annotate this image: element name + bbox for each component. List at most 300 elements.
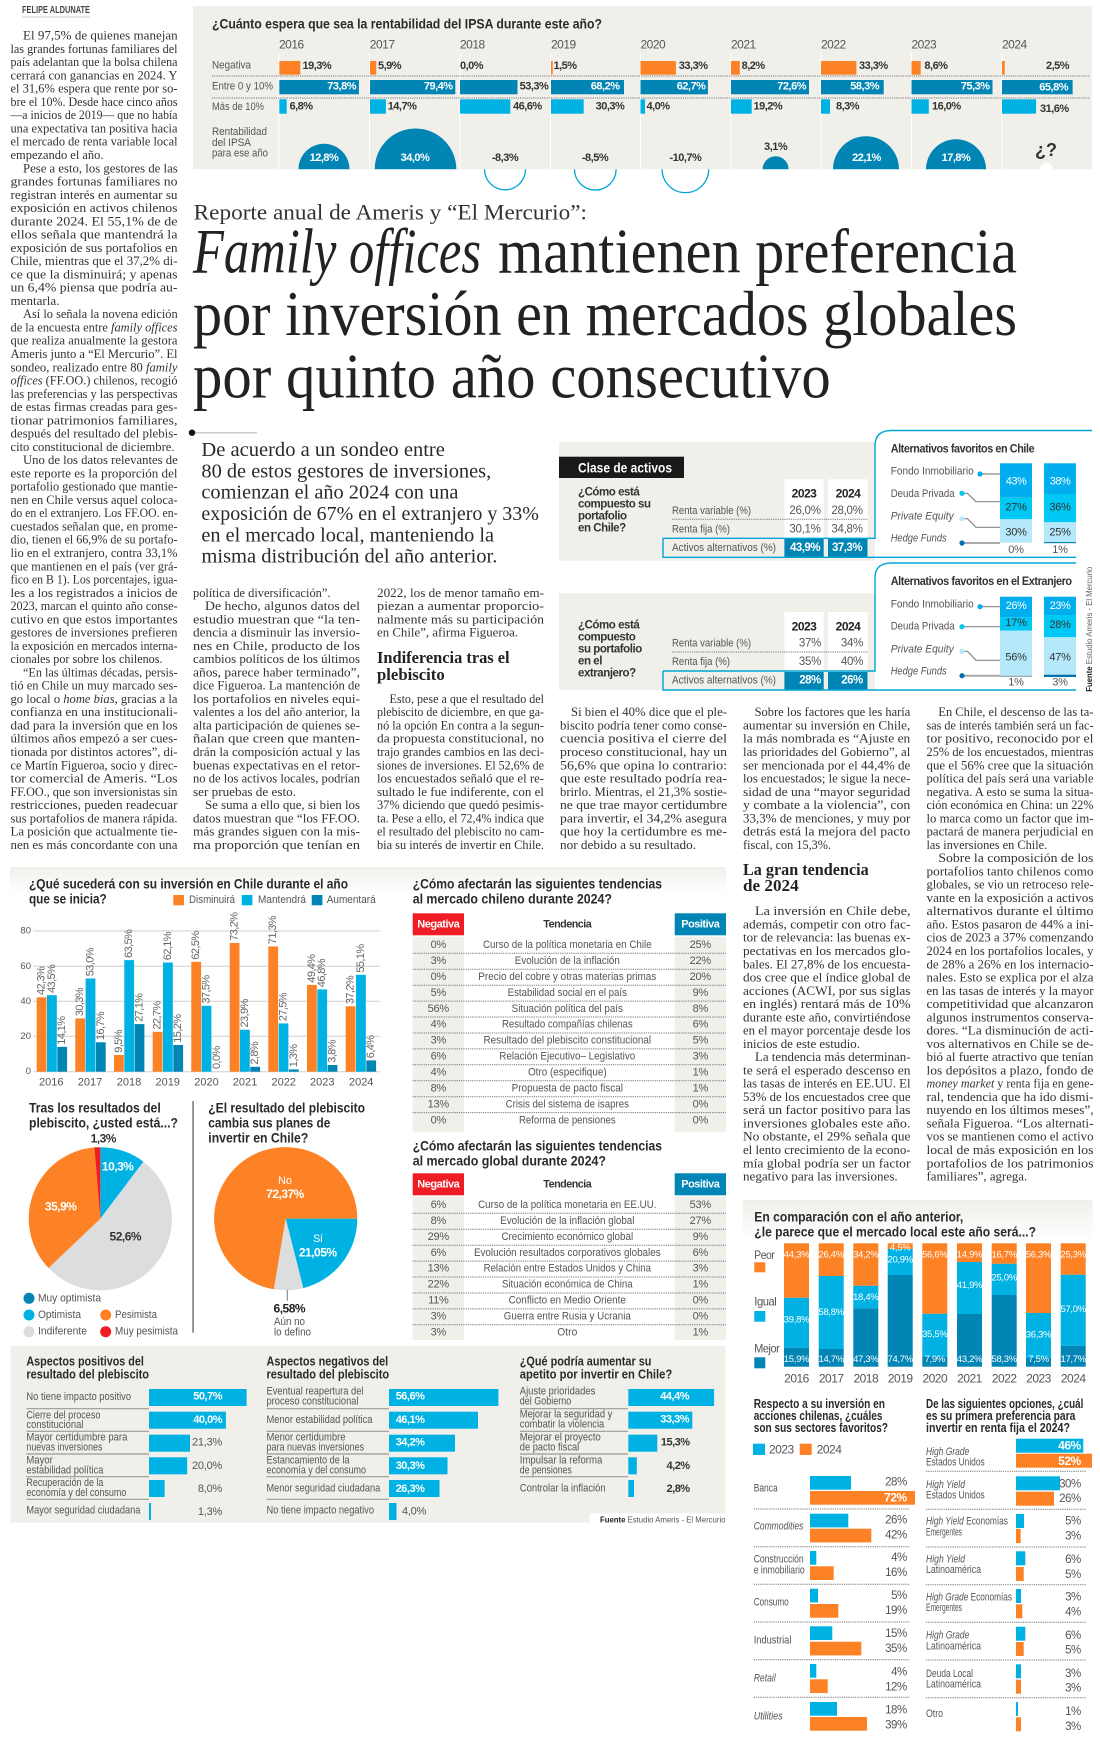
values: Negativa <box>302 60 1070 72</box>
outlined semicircles: negative IPSA return <box>484 169 709 193</box>
body text column 1: go local o home bias, gracias a la <box>10 691 178 706</box>
table rows: Propuesta de pacto fiscal <box>512 1082 623 1094</box>
year axis <box>784 1371 1086 1385</box>
bars 2024 <box>1016 1454 1092 1731</box>
values: 6% <box>1065 1630 1081 1642</box>
grid: 0 <box>26 1066 31 1077</box>
body text column 1: offices (FF.OO.) chilenos, recogió <box>10 372 178 388</box>
body text column 6: money market y renta fija en gene- <box>926 1076 1094 1091</box>
bar list: appetite to invest in Chile <box>520 1354 714 1497</box>
callout: undecided: lo defino <box>274 1327 311 1339</box>
year labels: 2022 <box>821 38 847 52</box>
body text column 6: de 28% a 26% en los internacio- <box>926 956 1094 971</box>
table rows: 13% <box>428 1098 449 1110</box>
body text column 1: El 97,5% de quienes manejan <box>23 28 178 43</box>
body text column 4: que hoy la certidumbre es me- <box>560 824 727 839</box>
table header: Positiva <box>681 1178 721 1190</box>
pie chart: plans to invest in Chile <box>208 1100 365 1339</box>
value labels: 73,2% <box>229 912 241 941</box>
legend: Muy pesimista <box>115 1326 179 1338</box>
body text column 1: que mantienen en el país (ver grá- <box>10 558 178 573</box>
year labels: 2019 <box>551 38 577 52</box>
table rows <box>428 1199 711 1338</box>
slice labels: 10,3% <box>102 1160 134 1174</box>
pie chart: mood after the plebiscite <box>24 1100 179 1338</box>
value labels: 6,4% <box>365 1035 377 1058</box>
values: Más de 10: 30,3% <box>596 101 625 113</box>
values: 19% <box>885 1605 907 1617</box>
body text column 2: ñalan que creen que manten- <box>193 731 360 746</box>
sector labels: Consumo <box>754 1597 789 1609</box>
bar list: negative aspects: resultado del plebiscito <box>266 1368 389 1382</box>
stacked bar 2023: 1% <box>1008 676 1024 688</box>
body text column 3: 2022, los de menor tamaño em- <box>377 585 544 600</box>
body text column 5: dos cree que el índice global de <box>743 970 911 984</box>
table: foreign portfolio: 2023 <box>792 619 817 633</box>
question: Chile portfolio: compuesto su <box>578 499 651 511</box>
body text column 2: dencia a disminuir las inversio- <box>193 625 360 640</box>
bar list: positive aspects: Mayor certidumbre para <box>26 1432 128 1444</box>
subheading: La gran tendencia: La gran tendencia <box>743 860 869 879</box>
question: Chile portfolio: en Chile? <box>578 522 626 534</box>
values: Entre 0 y 10: 58,3% <box>850 80 880 92</box>
legend <box>754 1248 780 1368</box>
slice labels <box>45 1131 142 1244</box>
table: Chile portfolio: 34,8% <box>831 523 863 535</box>
subheading: La gran tendencia: de 2024 <box>743 876 799 895</box>
option labels: High Grade <box>926 1630 969 1642</box>
table rows: 0% <box>431 971 446 983</box>
heading: ¿Qué sucederá con su inversión en Chile durante el año <box>29 875 348 891</box>
values: Más de 10: 6,8% <box>290 101 313 113</box>
stacked bar 2024: 38% <box>1050 476 1071 488</box>
body text column 6: bió al fuerte atractivo que tenían <box>926 1049 1094 1064</box>
body text column 1: confianza en una institucionali- <box>10 704 178 719</box>
table: foreign portfolio: 26% <box>841 675 863 687</box>
bar list: appetite to invest in Chile: Mejorar el proyecto <box>520 1432 601 1444</box>
bar list: negative aspects: Eventual reapertura del <box>266 1385 364 1397</box>
value labels: 16,7% <box>95 1011 107 1040</box>
heading: ¿Cómo afectarán las siguientes tendencias <box>413 875 662 891</box>
table rows: 5% <box>431 987 446 999</box>
row labels: para ese año <box>212 148 268 160</box>
white dot for 2024 <box>1040 163 1053 169</box>
heading <box>29 875 348 906</box>
return labels: -8,3% <box>492 152 519 164</box>
body text column 6: lo marca como un factor que im- <box>926 810 1094 825</box>
return labels: -10,7% <box>669 152 702 164</box>
values <box>884 1477 908 1731</box>
body text column 1: cito constitucional de diciembre. <box>10 439 174 454</box>
deck text: en el mercado local, manteniendo la <box>201 524 494 546</box>
body text column 2 <box>193 585 361 852</box>
body text column 1: FF.OO., que son inversionistas sin <box>10 784 178 799</box>
values: Más de 10 <box>290 101 1069 115</box>
body text column 6: algunos instrumentos conserva- <box>926 1009 1094 1024</box>
segment values: 18,4% <box>853 1292 879 1303</box>
legend: Mejor <box>754 1341 780 1355</box>
body text column 1: fico en B 1). Los porcentajes, igua- <box>10 572 178 586</box>
body text column 6: las inversiones en Chile. <box>926 837 1047 852</box>
option labels: High Yield <box>926 1479 966 1491</box>
table rows: 8% <box>431 1082 446 1094</box>
value labels: 62,1% <box>162 931 174 960</box>
body text column 2: drán la composición actual y las <box>193 744 360 759</box>
body text column 4: nor debido a su resultado. <box>560 837 696 852</box>
segment values: 36,3% <box>1026 1330 1052 1340</box>
values: 5% <box>891 1590 907 1602</box>
year labels: 2020 <box>640 38 666 52</box>
bar list: negative aspects <box>266 1354 498 1520</box>
values: Negativa: 8,2% <box>742 60 765 72</box>
body text column 3: trajo grandes cambios en las deci- <box>377 744 544 759</box>
grid: 40 <box>20 996 31 1007</box>
question: Chile portfolio: ¿Cómo está <box>578 486 640 498</box>
body text column 1: mentarla. <box>10 293 60 308</box>
table rows: 0% <box>693 1310 708 1322</box>
value labels: 27,1% <box>134 993 146 1022</box>
year labels: 2021 <box>731 38 757 52</box>
body text column 3: bia su interés de invertir en Chile. <box>377 837 544 852</box>
table rows: 0% <box>431 939 446 951</box>
stacked bar 2024: 47% <box>1049 651 1071 663</box>
question: foreign portfolio: en el <box>578 655 602 667</box>
grid: 60 <box>20 961 31 972</box>
year axis: 2017 <box>78 1077 102 1089</box>
value labels: 0,0% <box>211 1046 223 1069</box>
table: foreign portfolio: 28% <box>799 675 821 687</box>
return labels: 34,0% <box>401 152 430 164</box>
body text column 6: dores. “La disminución de acti- <box>926 1023 1094 1038</box>
body text column 5 <box>743 704 911 1184</box>
series labels: Fondo Inmobiliario <box>891 598 974 610</box>
grid: 20 <box>20 1031 31 1042</box>
deck text <box>201 439 539 568</box>
stacked bar 2023 <box>1000 597 1032 688</box>
return labels: -8,5% <box>582 152 609 164</box>
bar list: appetite to invest in Chile: 33,3% <box>660 1414 690 1426</box>
row labels: Rentabilidad <box>212 126 267 138</box>
legend <box>24 1292 179 1338</box>
year axis: 2021 <box>233 1077 257 1089</box>
body text column 5: inversiones globales este año. <box>743 1116 910 1130</box>
value labels <box>36 912 377 1069</box>
headline <box>192 216 1017 411</box>
body text column 2: estudio muestran que “la ten- <box>193 611 360 626</box>
body text column 1: gestores de inversiones prefieren <box>10 625 178 640</box>
segment values: 57,0% <box>1060 1304 1087 1315</box>
body text column 3: da propuesta constitucional, no <box>377 731 544 746</box>
body text column 2: De hecho, algunos datos del <box>205 598 360 613</box>
heading: Respecto a su inversión en <box>754 1397 885 1411</box>
body text column 5: las prioridades del Gobierno”, al <box>743 744 911 759</box>
value labels: 2,8% <box>249 1041 261 1065</box>
stacked bar 2023: 0% <box>1008 544 1024 556</box>
table rows: Resultado compañías chilenas <box>502 1019 633 1031</box>
sector labels: Utilities <box>754 1711 783 1723</box>
body text column 4 <box>560 704 728 852</box>
body text column 6: globales, se vio un retroceso rele- <box>926 877 1094 892</box>
stacked bar 2024: 1% <box>1052 544 1068 556</box>
table rows: 5% <box>693 1035 708 1047</box>
bar list: negative aspects: Menor certidumbre <box>266 1432 346 1444</box>
body text column 4: brirlo. Mientras, el 21,3% sostie- <box>560 784 727 799</box>
bar list: positive aspects: estabilidad política <box>26 1464 104 1476</box>
heading: IPSA question: ¿Cuánto espera que sea la rentabilidad del IPSA durante este año? <box>212 16 602 32</box>
body text column 6: portafolios tanto chilenos como <box>926 863 1094 878</box>
values: 42% <box>885 1529 907 1541</box>
body text column 5: será un factor positivo para las <box>743 1102 910 1117</box>
table rows: Evolución resultados corporativos globales <box>474 1247 661 1259</box>
body text column 1: Así lo señala la novena edición <box>23 306 178 321</box>
body text column 5: La tendencia más determinan- <box>755 1049 910 1064</box>
body text column 2: ma proporción que tenían en <box>193 837 361 852</box>
label: Clase de activos: Clase de activos <box>578 459 672 475</box>
callout outline: foreign alternatives <box>663 563 1076 690</box>
grid <box>20 926 380 1077</box>
bar list: appetite to invest in Chile: del Gobierno <box>520 1395 571 1407</box>
series labels: Deuda Privada <box>891 621 955 633</box>
values: Entre 0 y 10: 75,3% <box>961 80 990 92</box>
table: trends in the global market <box>413 1138 726 1340</box>
table rows: 29% <box>428 1231 449 1243</box>
subheading: Indiferencia tras el plebiscito: plebiscito <box>377 665 445 684</box>
year axis: 2016 <box>784 1371 810 1385</box>
row labels <box>212 60 273 160</box>
value labels: 23,9% <box>239 998 251 1028</box>
body text column 5: tor de relevancia: las buenas ex- <box>743 930 910 945</box>
values: 4% <box>1065 1607 1081 1619</box>
heading <box>754 1397 888 1435</box>
sector labels: Construcción <box>754 1553 804 1565</box>
chart: favourite alternatives in Chile <box>891 441 1076 556</box>
segment values: 14,7% <box>818 1354 845 1365</box>
legend: Indiferente <box>38 1326 87 1338</box>
body text column 6: tor positivo, reconocido por el <box>926 731 1094 746</box>
body text column 5: ser mencionada por el 44,4% de <box>743 757 911 772</box>
deck marker <box>189 430 257 436</box>
body text column 3: ta. Pese a ello, el 72,4% indica que <box>377 810 544 825</box>
body text column 2: Se suma a ello que, si bien los <box>205 797 360 812</box>
table rows: Curso de la política monetaria en EE.UU. <box>478 1199 656 1211</box>
value labels: 9,5% <box>113 1029 125 1053</box>
year labels: 2024 <box>1002 38 1028 52</box>
body text column 6: los depósitos a plazo, fondo de <box>926 1062 1094 1077</box>
body text column 1: después del resultado del plebis- <box>10 426 178 441</box>
body text column 1: tió en Chile un muy marcado ses- <box>10 678 178 693</box>
table header: Positiva <box>681 918 721 930</box>
slice labels: Sí <box>313 1233 323 1245</box>
table rows: Precio del cobre y otras materias primas <box>478 971 657 983</box>
byline <box>22 5 90 18</box>
stacked bar 2024: 23% <box>1050 600 1071 612</box>
option labels: Emergentes <box>926 1526 962 1538</box>
table rows: 0% <box>693 1098 708 1110</box>
bar list: positive aspects <box>26 1354 247 1520</box>
values: Negativa: 0,0% <box>460 60 484 72</box>
segment values: 7,9% <box>925 1354 946 1365</box>
table rows: 0% <box>693 1294 708 1306</box>
option labels: Latinoamérica <box>926 1679 982 1691</box>
bar list: positive aspects: 8,0% <box>198 1483 222 1495</box>
slice labels: 72,37% <box>266 1187 305 1201</box>
body text column 1: durante 2024. El 55,1% de de <box>10 213 178 228</box>
table: Chile portfolio: Renta variable (%) <box>672 505 751 517</box>
option labels: High Yield Economías <box>926 1516 1008 1528</box>
option labels: High Grade <box>926 1446 969 1458</box>
body text column 5: el lento crecimiento de la econo- <box>743 1142 910 1157</box>
body text column 2: datos muestran que “los FF.OO. <box>193 810 360 825</box>
body text column 2: más grandes siguen con la mis- <box>193 824 360 839</box>
body text column 1: Ameris junto a “El Mercurio”. El <box>10 346 178 361</box>
value labels: 63,5% <box>123 929 135 958</box>
heading <box>413 875 662 906</box>
values: 6% <box>1065 1554 1081 1566</box>
values: 72% <box>884 1490 908 1504</box>
header band for left charts <box>10 867 726 893</box>
body text column 4: biscito podría tener como conse- <box>560 718 727 732</box>
table rows: 3% <box>693 1263 708 1275</box>
body text column 1: de la encuesta entre family offices <box>10 320 178 334</box>
segment values: 16,7% <box>991 1250 1018 1260</box>
sector labels: Commodities <box>754 1521 804 1533</box>
bars 2023 <box>810 1476 851 1716</box>
values: Más de 10: 4,0% <box>646 101 670 113</box>
bar list: appetite to invest in Chile: Mejorar la seguridad y <box>520 1409 613 1421</box>
bar list: positive aspects: resultado del plebiscito <box>26 1368 149 1382</box>
legend: Muy optimista <box>38 1292 102 1304</box>
table rows: 11% <box>428 1294 449 1306</box>
values: 3% <box>1065 1531 1081 1543</box>
values: 12% <box>885 1682 907 1694</box>
bar list: appetite to invest in Chile: combatir la violencia <box>520 1419 605 1431</box>
body text column 1: empezando el año. <box>10 147 104 162</box>
body text column 2: buenas expectativas en el retor- <box>193 757 360 772</box>
bar list: negative aspects: 46,1% <box>396 1414 425 1426</box>
body text column 3: los encuestados señaló que el re- <box>377 770 544 786</box>
stacked bar 2023: 56% <box>1005 651 1027 663</box>
table rows: Otro <box>557 1326 577 1338</box>
stacked bar 2024: 3% <box>1052 676 1068 688</box>
values: 15% <box>885 1628 907 1640</box>
values: 26% <box>885 1514 907 1526</box>
table rows: 1% <box>693 1326 708 1338</box>
value labels: 46,8% <box>316 958 328 987</box>
values: 16% <box>885 1567 907 1579</box>
body text column 5: las tasas de interés en EE.UU. El <box>743 1076 911 1091</box>
headline: Family offices <box>192 216 481 287</box>
table rows <box>428 939 711 1126</box>
slice labels <box>266 1175 337 1259</box>
panel: expected IPSA return <box>193 6 1092 193</box>
option labels: Estados Unidos <box>926 1457 985 1469</box>
body text column 1: nen en Chile versus aquel coloca- <box>10 492 178 507</box>
table: Chile portfolio: 2023 <box>792 486 817 500</box>
body text column 6: pactará de manera perjudicial en <box>926 824 1094 839</box>
option labels: Otro <box>926 1708 943 1720</box>
body text column 4: que este resultado podría rea- <box>560 770 727 786</box>
subheading: Indiferencia tras el plebiscito: Indiferencia tras el <box>377 648 510 667</box>
body text column 1: —a inicios de 2019— que no había <box>10 107 178 122</box>
bar list: negative aspects: 56,6% <box>396 1391 425 1403</box>
values: Más de 10: 19,2% <box>754 101 783 113</box>
body text column 1: un 6,4% piensa que podría au- <box>10 280 178 295</box>
body text column 1: Uno de los datos relevantes de <box>23 452 178 467</box>
return labels: 3,1% <box>764 141 788 153</box>
sector labels: Retail <box>754 1673 776 1685</box>
table rows: 1% <box>693 1066 708 1078</box>
values: 4% <box>891 1552 907 1564</box>
year axis: 2019 <box>888 1371 913 1385</box>
column separators <box>278 53 1002 169</box>
body text column 1: sus portafolios de manera rápida. <box>10 810 178 825</box>
table rows: 1% <box>693 1082 708 1094</box>
body text column 2: años, parece haber terminado”, <box>193 664 360 679</box>
series labels: Deuda Privada <box>891 488 955 500</box>
table: foreign portfolio: Activos alternativos (%) <box>672 675 776 687</box>
values: 18% <box>885 1704 907 1716</box>
values: Entre 0 y 10: 62,7% <box>677 80 706 92</box>
question: Chile portfolio: portafolio <box>578 510 627 522</box>
return labels: 22,1% <box>852 152 882 164</box>
stacked bar 2023: 27% <box>1005 501 1027 513</box>
series labels: Private Equity <box>891 643 955 655</box>
bar list: positive aspects: Cierre del proceso <box>26 1409 100 1421</box>
heading <box>413 1138 662 1169</box>
body text column 6: ral, tendencia que ha ido dismi- <box>926 1089 1094 1104</box>
segment values: 44,3% <box>784 1250 810 1260</box>
bar list: negative aspects: No tiene impacto negativo <box>266 1505 374 1517</box>
values: 3% <box>1065 1721 1081 1733</box>
bars: Mantendrá <box>47 960 366 1072</box>
year axis: 2020 <box>194 1077 219 1089</box>
body text column 5: fiscal, con 15,3%. <box>743 837 831 852</box>
body text column 5: en el mayor porcentaje desde los <box>743 1023 910 1038</box>
year axis: 2016 <box>39 1077 64 1089</box>
body text column 3: el resultado del plebiscito no cam- <box>377 824 544 839</box>
byline: FELIPE ALDUNATE <box>22 5 90 16</box>
heading: cambia sus planes de <box>208 1115 330 1131</box>
option labels: High Yield <box>926 1553 966 1565</box>
bar list: negative aspects: 34,2% <box>396 1437 425 1449</box>
question: foreign portfolio <box>578 619 642 679</box>
segment values <box>784 1242 1087 1365</box>
value labels: 71,3% <box>267 915 279 944</box>
segment values: 14,9% <box>957 1250 983 1260</box>
table rows: Resultado del plebiscito constitucional <box>483 1035 651 1047</box>
year axis: 2023 <box>310 1077 335 1089</box>
values: Más de 10: 46,6% <box>513 101 542 113</box>
table rows: 3% <box>431 1310 446 1322</box>
body text column 1: 2023, marcan el quinto año conse- <box>10 598 178 613</box>
legend: Mantendrá <box>258 894 307 906</box>
bars: Aumentará <box>57 1024 376 1072</box>
stacked bar 2023: 30% <box>1005 527 1027 539</box>
bar list: appetite to invest in Chile: Impulsar la reforma <box>520 1454 603 1466</box>
body text column 3: plebiscito de diciembre, en que ga- <box>377 704 544 719</box>
body text column 1: cerrará con ganancias en 2024. Y <box>10 67 178 82</box>
deck text: misma distribución del año anterior. <box>201 546 497 568</box>
body text column 2: nes en Chile, producto de los <box>193 638 360 653</box>
body text column 1: de estas firmas creadas para ges- <box>10 399 178 414</box>
body text column 4: para invertir, el 34,2% asegura <box>560 810 727 825</box>
table rows: Evolución de la inflación global <box>500 1215 634 1227</box>
values: Entre 0 y 10: 73,8% <box>327 80 357 92</box>
segment values: 56,3% <box>1026 1250 1052 1260</box>
value labels: 62,5% <box>190 931 202 960</box>
series labels: Hedge Funds <box>891 533 947 545</box>
year axis: 2024 <box>1061 1371 1086 1385</box>
